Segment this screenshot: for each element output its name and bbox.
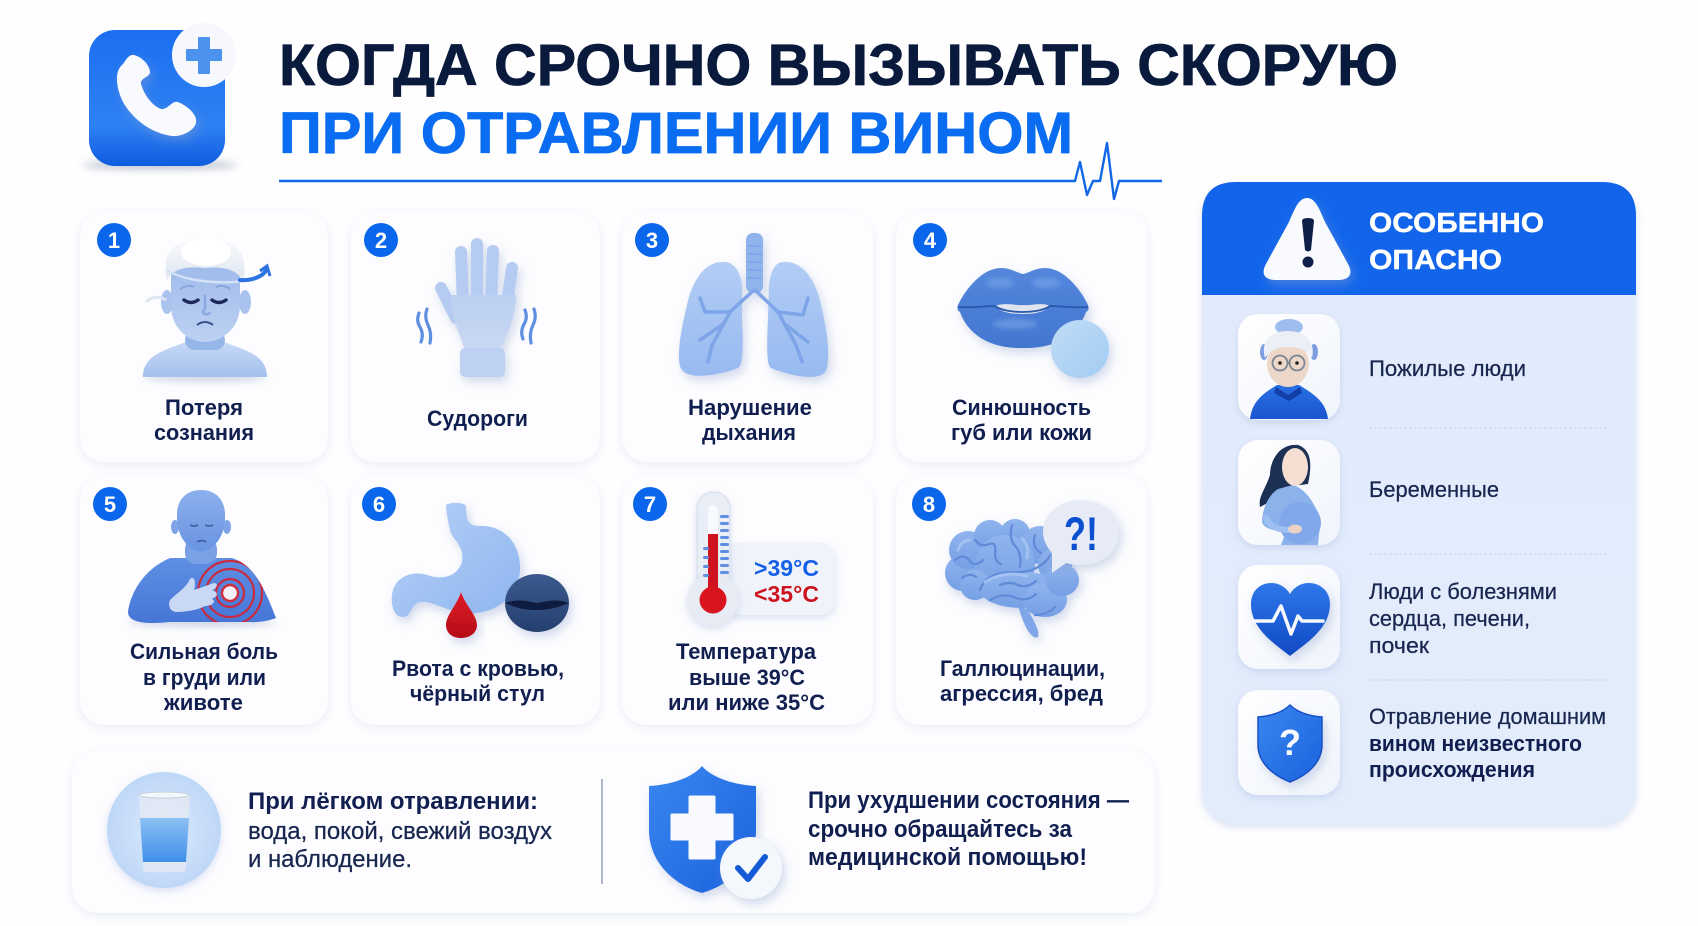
title <box>279 33 1398 166</box>
icon: dizzy head <box>143 238 270 381</box>
icon: speech bubble: ?! <box>1064 507 1098 560</box>
label: животе <box>163 690 243 715</box>
label <box>154 395 254 445</box>
heading: ОСОБЕННО <box>1369 207 1544 238</box>
icon: blue lips <box>957 268 1089 348</box>
text: mild poisoning <box>248 788 552 873</box>
card 4: cyanosis: 4 <box>924 228 937 253</box>
icon: heart with pulse <box>1251 583 1330 656</box>
card 4: cyanosis <box>896 211 1147 462</box>
row: elderly <box>1238 314 1526 420</box>
card 2: seizures: 2 <box>375 228 387 253</box>
icon: shield with question mark: ? <box>1279 722 1301 763</box>
row: chronic diseases <box>1238 565 1557 669</box>
label: или ниже 35°С <box>668 690 825 715</box>
callout: temperature values <box>726 543 835 615</box>
icon: medical shield <box>649 766 782 899</box>
label: чёрный стул <box>410 681 545 706</box>
icon: pregnant woman <box>1260 445 1321 545</box>
text: Отравление домашним <box>1369 704 1606 729</box>
card 5: chest pain <box>80 475 328 725</box>
text: mild poisoning: вода, покой, свежий воздух <box>248 818 552 845</box>
icon: dark lips sphere <box>505 574 569 632</box>
text: seek medical help: При ухудшении состояния — <box>808 787 1129 814</box>
icon: speech bubble <box>1043 500 1119 573</box>
label: в груди или <box>143 665 266 690</box>
label: Температура <box>676 639 817 664</box>
title: КОГДА СРОЧНО ВЫЗЫВАТЬ СКОРУЮ <box>279 33 1398 98</box>
callout: temperature values: <35°C <box>754 581 819 607</box>
label <box>688 395 812 445</box>
heartbeat divider line <box>279 143 1162 199</box>
card 5: chest pain: 5 <box>104 492 116 517</box>
icon: pill <box>1051 320 1109 378</box>
icon: blood drop <box>446 592 477 638</box>
panel: especially dangerous <box>1202 182 1636 824</box>
label <box>668 639 825 715</box>
label <box>940 656 1105 706</box>
title: ПРИ ОТРАВЛЕНИИ ВИНОМ <box>279 101 1073 166</box>
text: сердца, печени, <box>1369 606 1530 631</box>
text: Люди с болезнями <box>1369 579 1557 604</box>
text: seek medical help: медицинской помощью! <box>808 844 1087 871</box>
label: губ или кожи <box>951 420 1092 445</box>
card 7: temperature <box>622 475 873 725</box>
heading <box>1369 207 1544 275</box>
label: Сильная боль <box>130 639 278 664</box>
label: Судороги <box>427 406 528 431</box>
text: почек <box>1369 633 1429 658</box>
card 3: breathing: 3 <box>646 228 658 253</box>
icon: brain <box>945 519 1079 637</box>
heading: ОПАСНО <box>1369 244 1502 275</box>
header band <box>1202 182 1636 295</box>
card 1: loss of consciousness <box>80 211 328 462</box>
card 8: hallucinations: 8 <box>923 492 935 517</box>
row: unknown wine <box>1238 690 1606 795</box>
label <box>130 639 278 715</box>
label: Нарушение <box>688 395 812 420</box>
card 6: vomiting blood: 6 <box>373 492 385 517</box>
label: агрессия, бред <box>940 681 1103 706</box>
text <box>1369 579 1557 658</box>
text: seek medical help: срочно обращайтесь за <box>808 816 1073 843</box>
icon: stomach <box>392 503 520 617</box>
text: вином неизвестного <box>1369 731 1582 756</box>
card 8: hallucinations <box>896 475 1147 725</box>
icon: lungs <box>679 233 828 377</box>
label: Рвота с кровью, <box>392 656 564 681</box>
row: pregnant <box>1238 440 1499 545</box>
label: дыхания <box>702 420 796 445</box>
text: mild poisoning: и наблюдение. <box>248 846 412 873</box>
label: выше 39°С <box>689 665 805 690</box>
text: происхождения <box>1369 757 1535 782</box>
label <box>392 656 564 706</box>
card 1: loss of consciousness: 1 <box>108 228 120 253</box>
callout: temperature values: >39°C <box>754 555 819 581</box>
text <box>1369 704 1606 782</box>
icon: tremor marks <box>418 309 535 343</box>
text: mild poisoning: При лёгком отравлении: <box>248 788 538 815</box>
icon: shaking hand <box>441 244 516 377</box>
card 6: vomiting blood <box>351 475 600 725</box>
panel: bottom advice <box>72 750 1155 913</box>
icon: warning triangle <box>1264 198 1350 280</box>
label: Галлюцинации, <box>940 656 1105 681</box>
label: Синюшность <box>952 395 1091 420</box>
icon: phone with medical plus <box>82 23 238 169</box>
icon: person with chest pain <box>128 490 276 626</box>
label <box>951 395 1092 445</box>
text: Пожилые люди <box>1369 356 1526 381</box>
text: seek medical help <box>808 787 1129 871</box>
label: Потеря <box>165 395 243 420</box>
card 7: temperature: 7 <box>644 492 656 517</box>
icon: elderly woman <box>1250 319 1328 419</box>
label: сознания <box>154 420 254 445</box>
card 3: breathing <box>622 211 873 462</box>
text: Беременные <box>1369 477 1499 502</box>
icon: thermometer <box>687 492 739 626</box>
icon: shield with question mark <box>1258 705 1322 782</box>
card 2: seizures <box>351 211 600 462</box>
icon: glass of water <box>107 772 221 888</box>
